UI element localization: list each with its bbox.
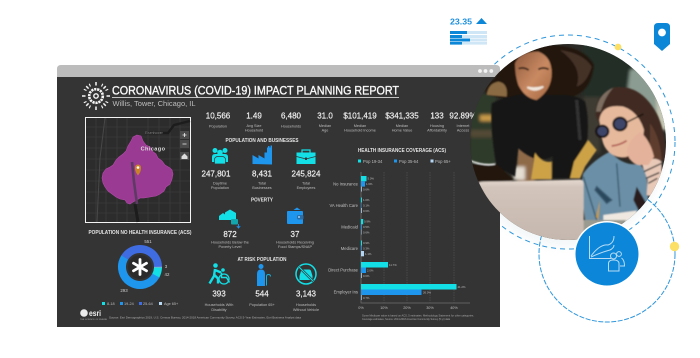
business stat values: 247,801 <box>202 170 231 178</box>
chart value labels: 0.3% <box>363 246 370 250</box>
donut value labels: 551 <box>144 239 152 244</box>
donut legend: Age 65+ <box>164 302 179 306</box>
chart category labels: Employer Ins <box>334 290 358 294</box>
chart value labels: 0.6% <box>363 230 370 234</box>
donut value labels: 293 <box>120 288 128 293</box>
key stats row: Median <box>319 124 331 128</box>
key stats row: 92.89% <box>449 112 477 120</box>
chart value labels: 0.7% <box>363 296 370 300</box>
icon: food stamp wallet <box>287 208 304 224</box>
at-risk stat values: Households With <box>205 303 233 307</box>
photo: two women at a laptop <box>465 40 670 245</box>
at-risk stat values: Disability <box>211 308 227 312</box>
donut legend <box>102 302 179 306</box>
at-risk stat values: Households <box>296 303 316 307</box>
icon: blue analytics circle <box>574 221 640 287</box>
chart axis labels: 30% <box>426 306 434 310</box>
at-risk stat values: 393 <box>212 290 226 298</box>
glasses <box>596 118 627 137</box>
at-risk stat values: Population 65+ <box>249 303 275 307</box>
dashed orbit: large <box>461 35 675 249</box>
report window <box>57 65 500 327</box>
key stats row: $101,419 <box>343 112 377 120</box>
donut legend: 25-64 <box>143 302 153 306</box>
poverty stat values <box>211 230 314 249</box>
poverty stat values: 37 <box>291 230 300 239</box>
key stats row: 31.0 <box>317 112 333 120</box>
chart axis labels: 20% <box>403 306 411 310</box>
icon: senior with cane <box>257 264 270 286</box>
icon: houses <box>219 210 240 228</box>
key stats row: Avg Size <box>247 124 261 128</box>
business stat values: Total <box>302 182 310 186</box>
business stat values: Total <box>258 182 266 186</box>
chart category labels: Direct Purchase <box>328 268 359 272</box>
key stats row: Age <box>322 128 328 132</box>
at-risk stat values <box>205 290 319 312</box>
chart value labels: 26.0% <box>423 290 431 294</box>
donut heading: POPULATION NO HEALTH INSURANCE (ACS) <box>88 230 192 236</box>
esri logo: esri <box>89 309 101 318</box>
chart value labels <box>363 176 466 300</box>
key stats row: Home Value <box>392 128 412 132</box>
chart category labels: Medicare <box>341 246 359 251</box>
business stat values: Businesses <box>252 186 272 190</box>
key stats row: Population <box>209 124 227 128</box>
at-risk stat values: Without Vehicle <box>293 308 319 312</box>
bar chart: health insurance coverage <box>328 148 474 321</box>
key stats row: 1.49 <box>246 112 262 120</box>
chart value labels: 0.9% <box>364 220 371 224</box>
photo background <box>470 40 670 183</box>
hair: second woman <box>596 87 665 163</box>
chart value labels: 2.0% <box>367 268 374 272</box>
key stats row: Access <box>457 128 469 132</box>
icon: people <box>212 148 228 164</box>
map label: Chicago <box>141 146 166 152</box>
dot: yellow top <box>615 44 621 50</box>
chart axis labels <box>358 306 458 310</box>
stat widget: 23.35 with bars: 23.35 <box>450 16 472 26</box>
business stat values: Population <box>211 186 229 190</box>
chart legend: Pop 35-64 <box>399 159 419 164</box>
icon: location pin <box>654 23 670 51</box>
map panel: Eisenhower <box>145 131 164 135</box>
business stat values: Employees <box>297 186 315 190</box>
poverty stat values: Poverty Level <box>218 245 242 249</box>
dot: yellow right <box>670 242 679 251</box>
section: poverty <box>211 198 314 249</box>
business stat values: 245,824 <box>292 170 321 178</box>
window title bar <box>57 65 500 77</box>
face: second woman <box>599 106 644 157</box>
key stats row: Median <box>396 124 408 128</box>
chart rows <box>361 176 456 300</box>
key stats row: Internet <box>457 124 470 128</box>
chart legend: Pop 19-34 <box>363 159 383 164</box>
key stats row: Households <box>281 124 301 128</box>
dashed orbit: small <box>539 186 675 322</box>
key stats row: $341,335 <box>385 112 419 120</box>
business stat values: 8,431 <box>252 170 273 178</box>
key stats row: Median <box>354 124 366 128</box>
chart axis labels: 10% <box>380 306 388 310</box>
chart footnote <box>362 314 474 321</box>
chart value labels: 5.0% <box>368 176 374 180</box>
chart category labels: VA Health Care <box>329 203 359 208</box>
papers and table <box>582 210 638 232</box>
key stats row: Affordability <box>427 128 447 132</box>
poverty stat values: 872 <box>223 230 237 239</box>
chart value labels: 0.6% <box>363 188 370 192</box>
chart footnote: Coverage estimates, Source: 2014-2018 American Community Survey (5-yr) data <box>362 317 450 321</box>
chart value labels: 0.6% <box>363 209 370 213</box>
chart footnote: Some Medicare value is based on ACS, 5 estimates. Methodology Statement for other categories. <box>362 314 474 318</box>
key stats row: Housing <box>430 124 444 128</box>
sweater sleeve <box>642 159 662 197</box>
donut value labels: 42 <box>165 272 170 277</box>
donut legend: 19-24 <box>124 302 134 306</box>
drive-time area <box>102 135 173 204</box>
key stats row: 10,566 <box>206 112 231 120</box>
chart value labels: 1.0% <box>363 198 370 202</box>
business stat values <box>202 170 321 190</box>
icon: briefcase <box>296 150 316 164</box>
dark dashboard panel <box>57 77 500 327</box>
donut legend: 8-18 <box>107 302 115 306</box>
section heading: AT RISK POPULATION <box>238 257 287 263</box>
map pin <box>135 164 141 176</box>
donut value labels <box>120 239 170 293</box>
chart value labels: 41.2% <box>458 285 466 289</box>
denim jacket <box>582 152 648 220</box>
map controls <box>180 131 189 160</box>
hand <box>627 132 654 165</box>
chart axis labels: 0% <box>358 306 364 310</box>
face: first woman <box>515 52 552 100</box>
title: Willis, Tower, Chicago, IL <box>112 99 196 108</box>
icon: wheelchair with carer <box>210 263 230 284</box>
laptop <box>478 180 584 243</box>
chart value labels: 11.7% <box>389 263 397 267</box>
icon: no vehicle <box>296 264 316 284</box>
chart value labels: 0.1% <box>363 204 370 208</box>
donut value labels: 3 <box>165 264 168 269</box>
chart heading: HEALTH INSURANCE COVERAGE (ACS) <box>358 148 446 154</box>
yellow jacket <box>531 140 597 179</box>
arm sleeve: first woman <box>470 163 513 182</box>
hair: first woman <box>486 45 594 101</box>
figures <box>470 45 665 243</box>
poverty stat values: Households Receiving <box>276 240 314 244</box>
title: CORONAVIRUS (COVID-19) IMPACT PLANNING REPORT <box>112 84 399 98</box>
key stats row <box>206 112 477 132</box>
chart value labels: 1.6% <box>366 182 373 186</box>
chart value labels: 0.6% <box>363 274 370 278</box>
chart value labels: 0.5% <box>363 225 370 229</box>
esri logo: THE SCIENCE OF WHERE <box>80 319 108 321</box>
source footnote: Source: Esri Demographics 2019, U.S. Census Bureau, 2014-2018 American Community Survey, ACS 5-Year Estimates, Esri Business Analyst data <box>109 316 301 320</box>
donut centre icon <box>128 255 152 279</box>
chart value labels: 1.1% <box>365 252 372 256</box>
donut section <box>88 230 192 306</box>
chart category labels: No Insurance <box>333 182 359 186</box>
chart legend: Pop 65+ <box>435 159 451 164</box>
photo halo <box>467 49 665 247</box>
key stats row: 6,480 <box>281 112 302 120</box>
chart value labels: 0.9% <box>363 241 370 245</box>
icon: factory <box>252 146 272 164</box>
chart category labels <box>328 182 359 294</box>
body: first woman <box>491 93 588 178</box>
title <box>112 84 399 108</box>
esri logo <box>80 309 108 321</box>
map panel <box>86 118 190 222</box>
icon: virus emblem <box>82 82 110 110</box>
business stat values: Daytime <box>213 182 227 186</box>
section: at risk population <box>205 257 319 312</box>
key stats row: Household Income <box>344 128 376 132</box>
at-risk stat values: 3,143 <box>296 290 317 298</box>
donut chart <box>115 242 165 292</box>
section heading: POVERTY <box>251 198 274 204</box>
poverty stat values: Food Stamps/SNAP <box>278 245 312 249</box>
chart category labels: Medicaid <box>341 224 359 230</box>
chart legend <box>358 159 451 164</box>
stat widget: 23.35 with bars <box>450 16 487 45</box>
key stats row: Household <box>245 128 263 132</box>
poverty stat values: Households Below the <box>211 240 249 244</box>
key stats row: 133 <box>430 112 444 120</box>
section heading: POPULATION AND BUSINESSES <box>226 138 299 144</box>
chart axis labels: 40% <box>450 306 458 310</box>
section: population and businesses <box>202 138 321 190</box>
at-risk stat values: 544 <box>255 290 269 298</box>
